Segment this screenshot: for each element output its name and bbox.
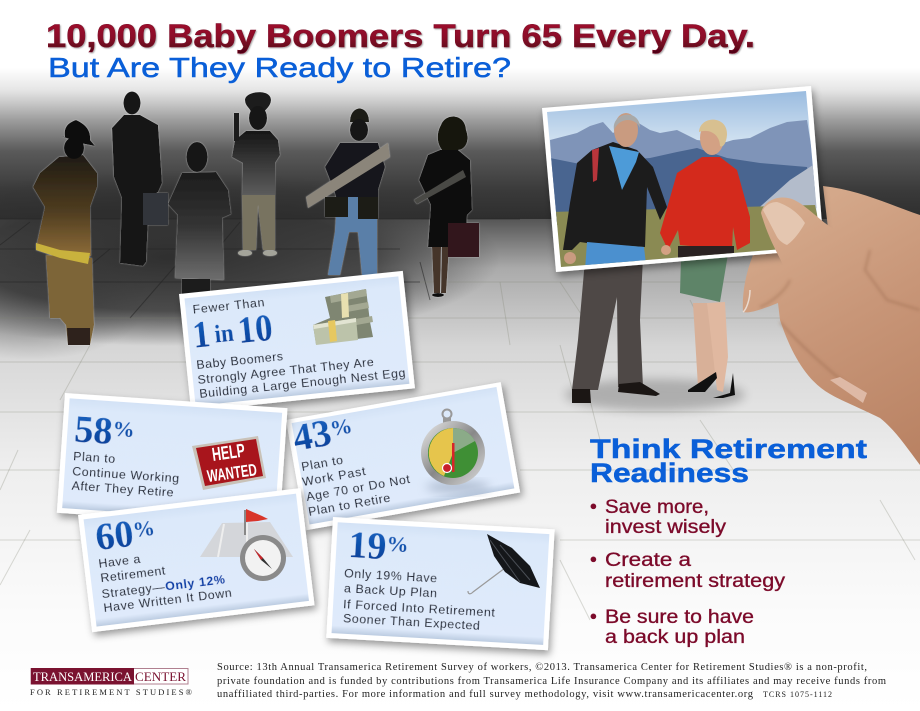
footer: source note: TCRS 1075-1112	[763, 690, 832, 699]
card text: a Back Up Plan	[344, 581, 437, 600]
footer: source note: unaffiliated third-parties. For more information and full survey methodology, visit www.transamericacenter.org	[217, 689, 754, 700]
figure: doctor	[168, 142, 231, 297]
figure: businesswoman	[414, 117, 479, 297]
icon: help wanted sign: HELP	[211, 441, 247, 466]
tip: back up plan: •	[590, 606, 597, 628]
card text: 19	[347, 524, 388, 568]
logo: transamerica center: CENTER	[135, 669, 186, 684]
card text: Building a Large Enough Nest Egg	[199, 366, 406, 401]
tip: save more: invest wisely	[605, 516, 726, 538]
card text: %	[131, 515, 156, 542]
tip: back up plan: a back up plan	[605, 626, 745, 648]
figure: firefighter	[33, 120, 97, 345]
title: 10,000 Baby Boomers Turn 65 Every Day.	[46, 18, 755, 54]
card text: Plan to Retire	[307, 491, 391, 519]
card: 60 percent	[78, 488, 315, 632]
hand: thumb over photo	[760, 197, 920, 403]
logo: transamerica center	[30, 668, 193, 697]
card text: 43	[290, 412, 334, 460]
card text: %	[386, 531, 409, 557]
thumbnail	[763, 202, 805, 245]
card text: If Forced Into Retirement	[343, 597, 496, 620]
title	[46, 18, 755, 83]
card text: Age 70 or Do Not	[305, 472, 411, 504]
tip: save more: Save more,	[605, 496, 709, 518]
card: fewer than 1 in 10	[179, 271, 415, 411]
logo: transamerica center: FOR RETIREMENT STUDIES®	[30, 687, 193, 697]
tip: create a strategy: •	[590, 549, 597, 571]
photo content	[547, 91, 818, 267]
tip: create a strategy: Create a	[605, 549, 691, 571]
icon: stack of money	[313, 289, 373, 345]
card text: Fewer Than	[192, 295, 265, 317]
card text: %	[112, 416, 136, 442]
card text: Retirement	[100, 563, 166, 585]
card text: 60	[93, 513, 136, 559]
card text: Continue Working	[72, 464, 180, 485]
card text: 10	[236, 307, 275, 352]
figure: chef	[232, 92, 280, 256]
tip: save more	[590, 496, 726, 538]
icon: stopwatch	[421, 410, 490, 493]
footer: source note: Source: 13th Annual Transamerica Retirement Survey of workers, ©2013. Transamerica Center for Retirement Studies® is a non-profit,	[217, 662, 867, 673]
card text: After They Retire	[71, 479, 174, 500]
card: 58 percent	[57, 393, 287, 528]
logo: transamerica center: TRANSAMERICA	[33, 669, 133, 684]
card text	[70, 408, 183, 500]
card: 19 percent	[326, 517, 555, 650]
card text: in	[213, 320, 235, 348]
card text: Only 19% Have	[344, 566, 438, 585]
card text: Baby Boomers	[196, 349, 284, 372]
icon: help wanted sign	[192, 436, 266, 490]
figure: businessman	[112, 92, 168, 266]
heading: think retirement readiness: Readiness	[590, 458, 749, 488]
tip: back up plan	[590, 606, 754, 648]
couple standing on floor	[565, 254, 745, 411]
hand behind photo	[743, 186, 920, 465]
tip: create a strategy: retirement strategy	[605, 570, 785, 592]
card text: Sooner Than Expected	[343, 611, 480, 633]
card text	[189, 282, 406, 401]
card text: Work Past	[301, 464, 367, 489]
figure: construction worker	[306, 108, 390, 275]
icon: help wanted sign: WANTED	[206, 460, 258, 486]
silhouettes of workers	[33, 92, 479, 345]
card text: %	[328, 413, 354, 441]
heading: think retirement readiness: Think Retirement	[590, 434, 867, 464]
woman in photo	[660, 120, 750, 258]
heading: think retirement readiness	[590, 434, 867, 488]
card text: Plan to	[300, 453, 344, 474]
card: 43 percent	[286, 381, 520, 530]
man in photo	[563, 113, 667, 270]
card text	[341, 524, 500, 634]
list: retirement readiness tips	[590, 496, 785, 648]
woman's skirt, legs and heels	[680, 254, 735, 398]
card text: 1	[191, 313, 214, 357]
photo of retired couple	[530, 80, 830, 280]
tip: save more: •	[590, 496, 597, 518]
card text	[92, 502, 233, 615]
finger nail	[830, 377, 867, 403]
card text: Strategy—Only 12%	[101, 572, 226, 601]
man's trousers and shoes	[572, 257, 660, 403]
card text: Have a	[98, 552, 141, 571]
footer: source note: private foundation and is funded by contributions from Transamerica Life Insurance Company and its affiliates and may receive funds from	[217, 676, 886, 687]
tip: create a strategy	[590, 549, 785, 592]
icon: map, flag and compass	[200, 509, 293, 581]
card text: Strongly Agree That They Are	[197, 355, 374, 387]
tip: back up plan: Be sure to have	[605, 606, 754, 628]
icon: inverted umbrella	[468, 534, 540, 594]
title: But Are They Ready to Retire?	[48, 52, 511, 83]
card text: Have Written It Down	[103, 586, 233, 615]
card text: 58	[73, 408, 114, 453]
footer: source note	[217, 662, 886, 700]
card text: Plan to	[73, 449, 116, 466]
card text	[290, 400, 414, 519]
